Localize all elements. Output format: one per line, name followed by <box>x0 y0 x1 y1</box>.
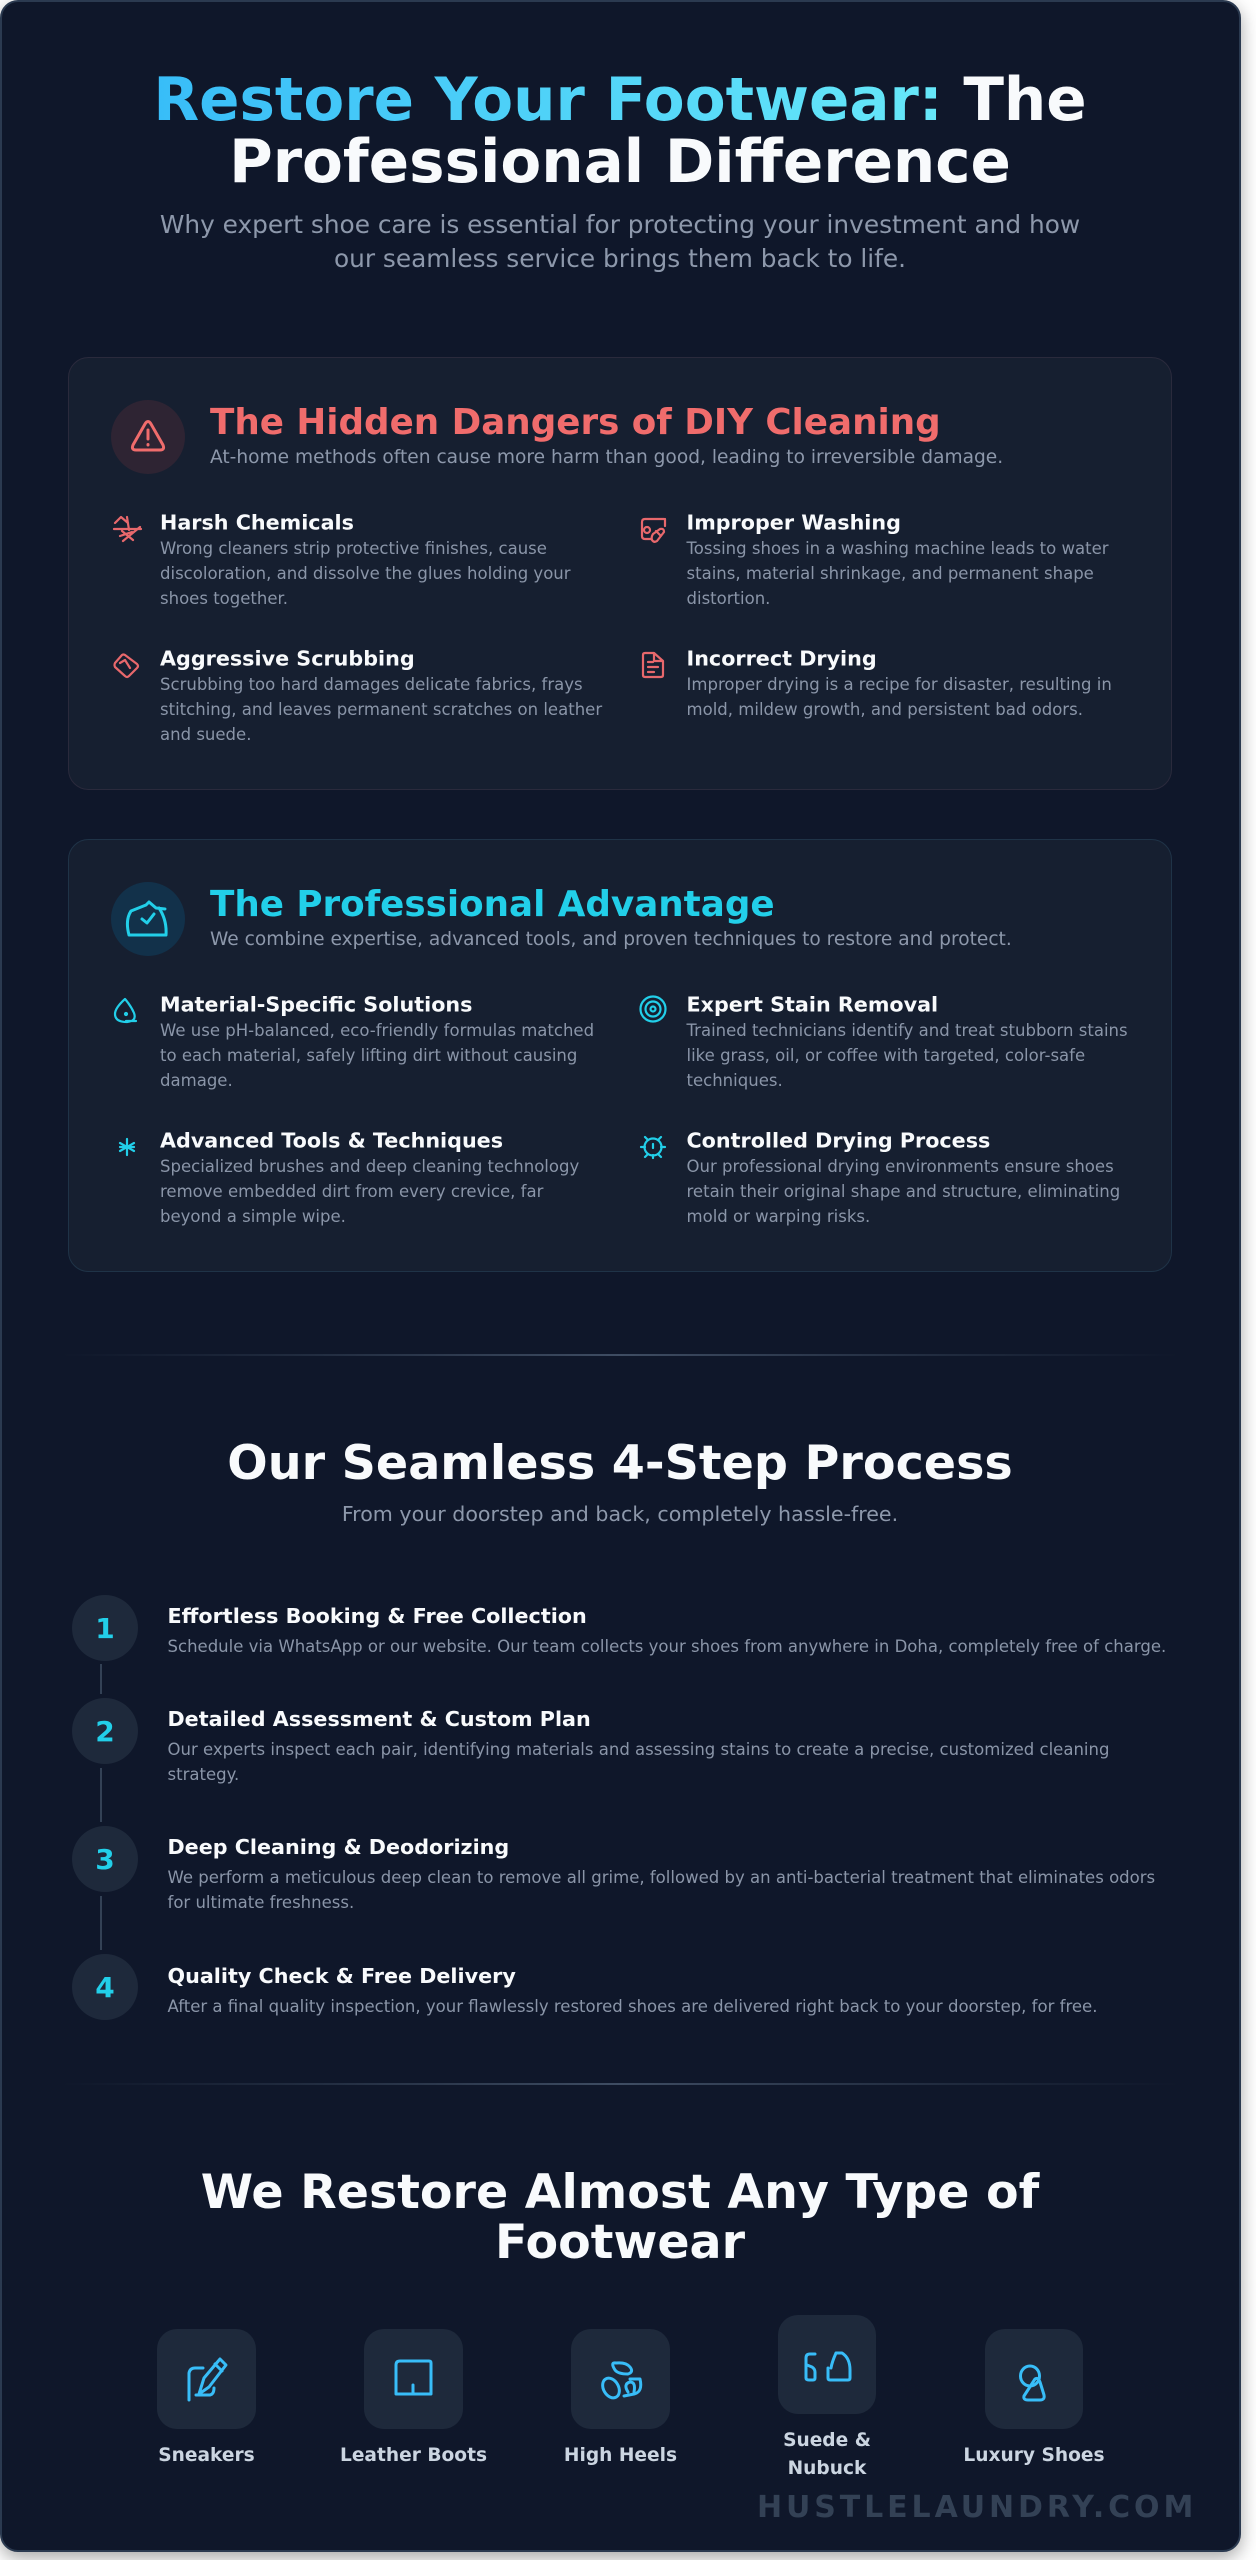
item: expert stain removal: techniques. <box>686 1071 783 1090</box>
heading: The Professional Advantage <box>210 884 775 925</box>
step 1: Schedule via WhatsApp or our website. Our team collects your shoes from anywhere in Doha, completely free of charge. <box>168 1637 1166 1656</box>
item: material-specific solutions <box>115 992 594 1090</box>
item: improper washing: stains, material shrinkage, and permanent shape <box>686 564 1094 583</box>
step 1: 1 <box>95 1612 115 1645</box>
item: improper washing <box>642 510 1109 608</box>
step 4: 4 <box>95 1971 115 2004</box>
title <box>153 66 1087 197</box>
item: controlled drying: Controlled Drying Process <box>686 1128 990 1152</box>
panel: hidden dangers of DIY cleaning <box>68 358 1172 790</box>
step 3: Deep Cleaning & Deodorizing <box>168 1835 509 1859</box>
item: harsh chemicals: discoloration, and dissolve the glues holding your <box>160 564 571 583</box>
item: aggressive scrubbing: and suede. <box>160 725 251 744</box>
step 4: After a final quality inspection, your flawlessly restored shoes are delivered right back to your doorstep, for free. <box>168 1997 1097 2016</box>
heading: The Hidden Dangers of DIY Cleaning <box>210 402 941 443</box>
panel intro: At-home methods often cause more harm than good, leading to irreversible damage. <box>210 447 1003 468</box>
step 3: for ultimate freshness. <box>168 1893 354 1912</box>
tile: luxury shoes: Luxury Shoes <box>963 2445 1105 2466</box>
item: harsh chemicals <box>114 510 571 608</box>
tile: luxury shoes <box>963 2329 1105 2466</box>
tile: sneakers: Sneakers <box>158 2445 255 2466</box>
item: incorrect drying: Improper drying is a recipe for disaster, resulting in <box>686 675 1112 694</box>
step 2: strategy. <box>168 1765 239 1784</box>
step 2: Our experts inspect each pair, identifying materials and assessing stains to create a precise, customized cleaning <box>168 1740 1109 1759</box>
item: expert stain removal: Expert Stain Removal <box>686 992 938 1016</box>
step 3 <box>72 1826 1155 1912</box>
item: incorrect drying: mold, mildew growth, and persistent bad odors. <box>686 700 1083 719</box>
title: Professional Difference <box>229 128 1011 197</box>
watermark: HUSTLELAUNDRY.COM <box>757 2490 1197 2525</box>
subtitle: our seamless service brings them back to life. <box>334 244 906 273</box>
icon: gauge with check <box>111 882 185 956</box>
section heading: process: Our Seamless 4-Step Process <box>227 1436 1013 1491</box>
step 3: We perform a meticulous deep clean to remove all grime, followed by an anti-bacterial treatment that eliminates odors <box>168 1868 1155 1887</box>
item: advanced tools: Specialized brushes and deep cleaning technology <box>160 1157 579 1176</box>
item: expert stain removal: like grass, oil, or coffee with targeted, color-safe <box>686 1046 1085 1065</box>
item: controlled drying: Our professional drying environments ensure shoes <box>686 1157 1114 1176</box>
item: advanced tools: remove embedded dirt from every crevice, far <box>160 1182 544 1201</box>
step 1: Effortless Booking & Free Collection <box>168 1604 587 1628</box>
item: material-specific solutions: damage. <box>160 1071 233 1090</box>
step 1 <box>72 1595 1166 1661</box>
item: material-specific solutions: We use pH-balanced, eco-friendly formulas matched <box>160 1021 594 1040</box>
tile: high heels <box>564 2329 677 2466</box>
item: harsh chemicals: shoes together. <box>160 589 288 608</box>
item: harsh chemicals: Wrong cleaners strip protective finishes, cause <box>160 539 547 558</box>
item: controlled drying: retain their original shape and structure, eliminating <box>686 1182 1120 1201</box>
item: incorrect drying: Incorrect Drying <box>686 646 877 670</box>
item: aggressive scrubbing: Scrubbing too hard damages delicate fabrics, frays <box>160 675 583 694</box>
panel intro: We combine expertise, advanced tools, and proven techniques to restore and protect. <box>210 929 1012 950</box>
tile: leather boots <box>340 2329 487 2466</box>
panel: professional advantage <box>68 840 1172 1272</box>
tile: high heels: High Heels <box>564 2445 677 2466</box>
section heading: footwear types: We Restore Almost Any Type of <box>201 2165 1041 2220</box>
item: aggressive scrubbing: Aggressive Scrubbing <box>160 646 415 670</box>
item: improper washing: Tossing shoes in a washing machine leads to water <box>686 539 1109 558</box>
item: expert stain removal <box>640 992 1128 1090</box>
item: improper washing: distortion. <box>686 589 770 608</box>
item: aggressive scrubbing <box>114 646 602 744</box>
step 4 <box>72 1954 1097 2020</box>
step 3: 3 <box>95 1843 115 1876</box>
item: expert stain removal: Trained technicians identify and treat stubborn stains <box>686 1021 1128 1040</box>
section subheading: process: From your doorstep and back, completely hassle-free. <box>342 1502 898 1526</box>
section heading: footwear types: Footwear <box>495 2215 746 2270</box>
tile: suede and nubuck <box>778 2315 876 2479</box>
item: controlled drying <box>641 1128 1120 1226</box>
item: incorrect drying <box>643 646 1112 719</box>
item: harsh chemicals: Harsh Chemicals <box>160 510 354 534</box>
tile: leather boots: Leather Boots <box>340 2445 487 2466</box>
section heading: footwear types <box>201 2165 1041 2270</box>
process timeline <box>72 1595 1166 2020</box>
tile: sneakers <box>157 2329 256 2466</box>
title: Restore Your Footwear: The <box>153 66 1087 135</box>
item: advanced tools <box>120 1128 579 1226</box>
item: material-specific solutions: to each material, safely lifting dirt without causing <box>160 1046 577 1065</box>
icon: warning triangle <box>111 400 185 474</box>
step 2: Detailed Assessment & Custom Plan <box>168 1707 591 1731</box>
item: aggressive scrubbing: stitching, and leaves permanent scratches on leather <box>160 700 602 719</box>
step 2 <box>72 1698 1109 1784</box>
step 2: 2 <box>95 1715 115 1748</box>
item: material-specific solutions: Material-Specific Solutions <box>160 992 472 1016</box>
subtitle: Why expert shoe care is essential for protecting your investment and how <box>160 210 1080 239</box>
item: advanced tools: beyond a simple wipe. <box>160 1207 346 1226</box>
tile: suede and nubuck: Nubuck <box>788 2458 867 2479</box>
subtitle <box>160 210 1080 273</box>
item: improper washing: Improper Washing <box>686 510 901 534</box>
step 4: Quality Check & Free Delivery <box>168 1964 516 1988</box>
item: advanced tools: Advanced Tools & Techniques <box>160 1128 503 1152</box>
item: controlled drying: mold or warping risks. <box>686 1207 870 1226</box>
tile: suede and nubuck: Suede & <box>783 2430 871 2451</box>
